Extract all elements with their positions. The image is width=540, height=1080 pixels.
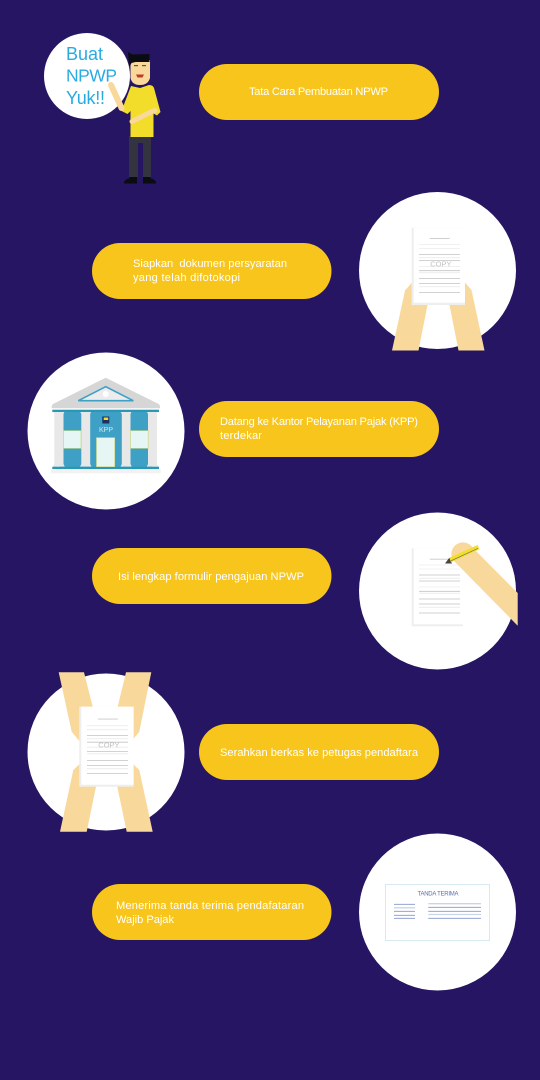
icon: tanda terima receipt (359, 834, 516, 990)
icon: hands passing copy document (28, 672, 184, 832)
icon: KPP building (28, 352, 184, 510)
step 4 pill: Isi lengkap formulir (92, 548, 332, 604)
step 2 pill: Siapkan dokumen: Siapkan dokumen persyaratan (133, 258, 287, 270)
speech bubble: Buat NPWP Yuk: Buat (66, 44, 103, 64)
step 1 pill: Tata Cara Pembuatan NPWP (199, 64, 439, 120)
step 6 pill: Menerima tanda terima: Wajib Pajak (116, 914, 174, 926)
step 2 pill: Siapkan dokumen (92, 243, 332, 299)
step 6 pill: Menerima tanda terima (92, 884, 332, 940)
step 4 pill: Isi lengkap formulir: Isi lengkap formulir pengajuan NPWP (118, 571, 304, 583)
icon: man in yellow shirt (111, 52, 160, 184)
step 3 pill: Datang ke KPP (199, 401, 439, 457)
icon: hands holding copy document (359, 192, 516, 350)
icon: hand writing on form (359, 512, 518, 670)
step 6 pill: Menerima tanda terima: Menerima tanda terima pendafataran (116, 900, 304, 912)
step 3 pill: Datang ke KPP: Datang ke Kantor Pelayanan Pajak (KPP) (220, 416, 418, 428)
step 3 pill: Datang ke KPP: terdekar (220, 430, 262, 442)
speech bubble: Buat NPWP Yuk: Yuk!! (66, 88, 105, 108)
icon: tanda terima receipt: TANDA TERIMA (418, 892, 458, 898)
speech bubble: Buat NPWP Yuk: NPWP (66, 66, 117, 86)
icon: hands holding copy document: COPY (430, 260, 451, 269)
step 2 pill: Siapkan dokumen: yang telah difotokopi (133, 272, 240, 284)
icon: hands passing copy document: COPY (98, 741, 120, 750)
icon: KPP building: KPP (99, 427, 113, 434)
speech bubble: Buat NPWP Yuk (44, 33, 130, 119)
step 5 pill: Serahkan berkas (199, 724, 439, 780)
step 1 pill: Tata Cara Pembuatan NPWP: Tata Cara Pembuatan NPWP (249, 86, 388, 98)
step 5 pill: Serahkan berkas: Serahkan berkas ke petugas pendaftara (220, 747, 419, 759)
